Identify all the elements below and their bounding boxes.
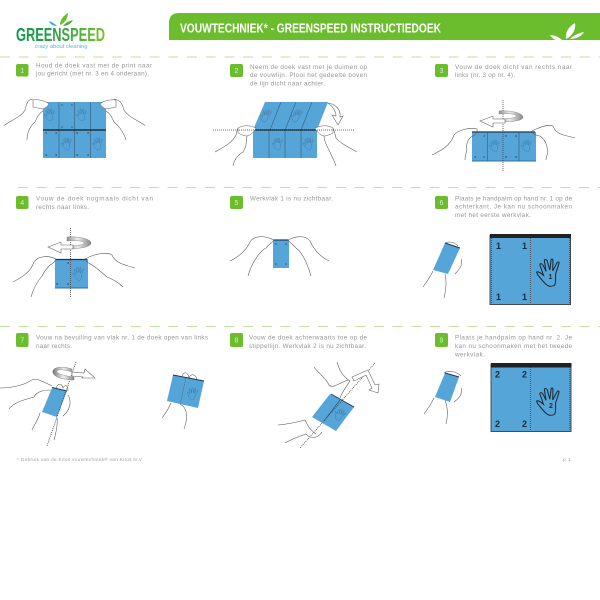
step 9 text: werkvlak. <box>454 352 485 358</box>
step 1 cloth: 4 <box>55 153 57 157</box>
step 3 cloth: 3 <box>505 155 507 159</box>
step 9 text: Plaats je handpalm op hand nr. 2. Je <box>455 334 572 342</box>
banner title: VOUWTECHNIEK* - GREENSPEED INSTRUCTIEDOEK <box>180 22 441 36</box>
step 2 badge <box>230 64 243 77</box>
step 3 fold line <box>502 100 504 171</box>
step 1 cloth: 3 <box>76 131 78 135</box>
logo <box>16 13 105 50</box>
step 4 badge <box>16 196 28 209</box>
step 3 text: links (nr. 3 op nr. 4). <box>455 72 515 79</box>
step 8 arrow <box>352 370 379 393</box>
step 8 text: Vouw de doek achterwaarts toe op de <box>249 334 367 342</box>
step 8 text: stippellijn. Werkvlak 2 is nu zichtbaar. <box>249 343 366 350</box>
step 4 hands <box>13 253 135 297</box>
step 6 text: achterkant. Je kan nu schoonmaken <box>455 204 572 210</box>
step 7 fold line <box>47 362 76 446</box>
step 1 cloth: 1 <box>61 125 63 129</box>
step 5 cloth: 1 <box>275 242 277 246</box>
step 4 text <box>36 196 153 211</box>
step 4 text: Vouw de doek nogmaals dicht van <box>36 196 153 202</box>
step 7 badge <box>16 333 28 347</box>
step 6 large panel <box>490 234 571 304</box>
step 5 cloth: 1 <box>275 262 277 266</box>
step 3 cloth <box>472 132 536 161</box>
step 3 cloth: 4 <box>483 155 485 159</box>
step 2 hands <box>215 126 357 166</box>
step 1 <box>4 62 152 158</box>
step 4 badge: 4 <box>20 200 24 207</box>
step 9 badge <box>435 333 448 347</box>
panel numbers <box>496 241 527 302</box>
step 1 cloth <box>43 102 106 158</box>
panel hand icon: 1 <box>549 274 553 281</box>
logo leaves <box>49 13 73 26</box>
panel numbers: 1 <box>522 292 527 302</box>
step 5 cloth <box>273 240 289 268</box>
step 7 arrow <box>53 367 95 380</box>
step 4 fold line <box>70 228 72 298</box>
footnote: * Gebruik van de Kitos vouwtechniek® van Kitos N.V. <box>17 456 143 462</box>
step 3 badge: 3 <box>440 68 444 75</box>
panel numbers: 2 <box>495 370 500 380</box>
step 8 <box>230 333 379 448</box>
step 4 text: rechts naar links. <box>36 204 89 211</box>
step 3 cloth: 3 <box>515 134 517 138</box>
step 3 cloth: 3 <box>515 155 517 159</box>
section dividers <box>0 57 600 326</box>
step 2 text: de vouwlijn. Plooi het gedeelte boven <box>250 72 367 79</box>
step 7 badge: 7 <box>20 338 24 344</box>
step 9 badge: 9 <box>440 338 444 344</box>
step 5 <box>230 196 333 276</box>
step 3 cloth: 4 <box>483 134 485 138</box>
step 6 text: met het eerste werkvlak. <box>455 212 531 219</box>
logo wordmark: GREENSPEED <box>16 25 105 45</box>
step 1 cloth: 1 <box>71 125 73 129</box>
step 2 text: Neem de doek vast met je duimen op <box>250 64 367 71</box>
step 6 badge: 6 <box>440 200 444 207</box>
step 5 badge: 5 <box>235 200 239 207</box>
step 8 hands <box>278 362 350 443</box>
step 1 badge: 1 <box>20 68 24 75</box>
step 9 <box>424 333 572 432</box>
step 7 left cloth <box>0 379 70 440</box>
step 9 text <box>454 334 572 358</box>
step 6 text: Plaats je handpalm op hand nr. 1 op de <box>455 196 572 202</box>
step 1 cloth: 4 <box>45 153 47 157</box>
step 3 cloth: 3 <box>505 134 507 138</box>
step 2 <box>213 64 367 166</box>
panel numbers: 2 <box>522 370 527 380</box>
panel numbers: 1 <box>522 241 527 251</box>
panel numbers <box>495 370 527 429</box>
step 4 cloth: 3 <box>67 282 69 286</box>
step 8 badge: 8 <box>235 338 239 344</box>
panel numbers: 1 <box>496 292 501 302</box>
step 5 cloth: 1 <box>285 262 287 266</box>
step 7 text: Vouw na bevuiling van vlak nr. 1 de doek open van links <box>36 334 208 342</box>
page number: p. 1 <box>563 457 571 463</box>
header banner <box>169 13 600 40</box>
step 5 text: Werkvlak 1 is nu zichtbaar. <box>250 196 333 202</box>
step 7 <box>0 333 208 446</box>
step 3 cloth: 4 <box>474 155 476 159</box>
step 1 hands <box>4 99 145 140</box>
step 1 cloth: 4 <box>45 131 47 135</box>
step 8 fold line <box>300 363 375 448</box>
logo tagline: crazy about cleaning <box>34 44 88 50</box>
step 2 text: de lijn dicht naar achter. <box>250 80 325 88</box>
step 6 <box>423 196 572 304</box>
step 1 badge <box>16 64 28 76</box>
step 9 text: kan nu schoonmaken met het tweede <box>455 343 572 350</box>
step 5 hands <box>230 237 329 276</box>
step 7 right cloth <box>162 373 204 429</box>
step 8 badge <box>230 333 243 347</box>
step 7 text <box>36 334 208 350</box>
step 1 cloth: 3 <box>87 131 89 135</box>
step 1 text: jou gericht (met nr. 3 en 4 onderaan). <box>35 70 149 78</box>
step 2 fold line <box>213 129 354 131</box>
step 4 cloth <box>55 259 88 288</box>
step 3 text <box>455 64 572 79</box>
banner leaves <box>550 23 584 40</box>
step 1 cloth: 3 <box>76 153 78 157</box>
step 1 text: Houd de doek vast met de print naar <box>36 62 152 70</box>
step 1 cloth: 4 <box>55 131 57 135</box>
step 1 cloth: 3 <box>87 153 89 157</box>
step 4 cloth: 3 <box>67 261 69 265</box>
step 9 small cloth with hand <box>424 371 462 424</box>
step 3 text: Vouw de doek dicht van rechts naar <box>455 64 572 71</box>
step 3 badge <box>435 64 448 77</box>
step 3 hands <box>432 125 575 160</box>
step 8 cloth <box>312 394 354 431</box>
step 2 text <box>250 64 367 88</box>
panel numbers: 2 <box>522 419 527 429</box>
step 1 cloth: 1 <box>61 103 63 107</box>
step 1 cloth: 1 <box>71 103 73 107</box>
step 5 cloth: 1 <box>285 242 287 246</box>
step 6 badge <box>435 196 448 209</box>
step 7 text: naar rechts. <box>36 343 72 350</box>
panel numbers: 2 <box>495 419 500 429</box>
step 4 arrow <box>64 237 91 249</box>
step 2 cloth <box>253 102 328 158</box>
step 4 cloth: 3 <box>56 282 58 286</box>
step 2 badge: 2 <box>235 68 239 75</box>
step 6 small cloth with hand <box>423 242 462 298</box>
step 4 <box>13 196 153 298</box>
step 9 large panel <box>491 363 572 432</box>
step 6 text <box>455 196 572 219</box>
step 3 arrow <box>496 111 523 122</box>
panel hand icon: 2 <box>549 403 553 410</box>
panel numbers: 1 <box>496 241 501 251</box>
step 3 <box>432 64 575 171</box>
step 2 arrow <box>328 103 343 125</box>
step 8 text <box>249 334 367 350</box>
step 1 text <box>35 62 152 78</box>
